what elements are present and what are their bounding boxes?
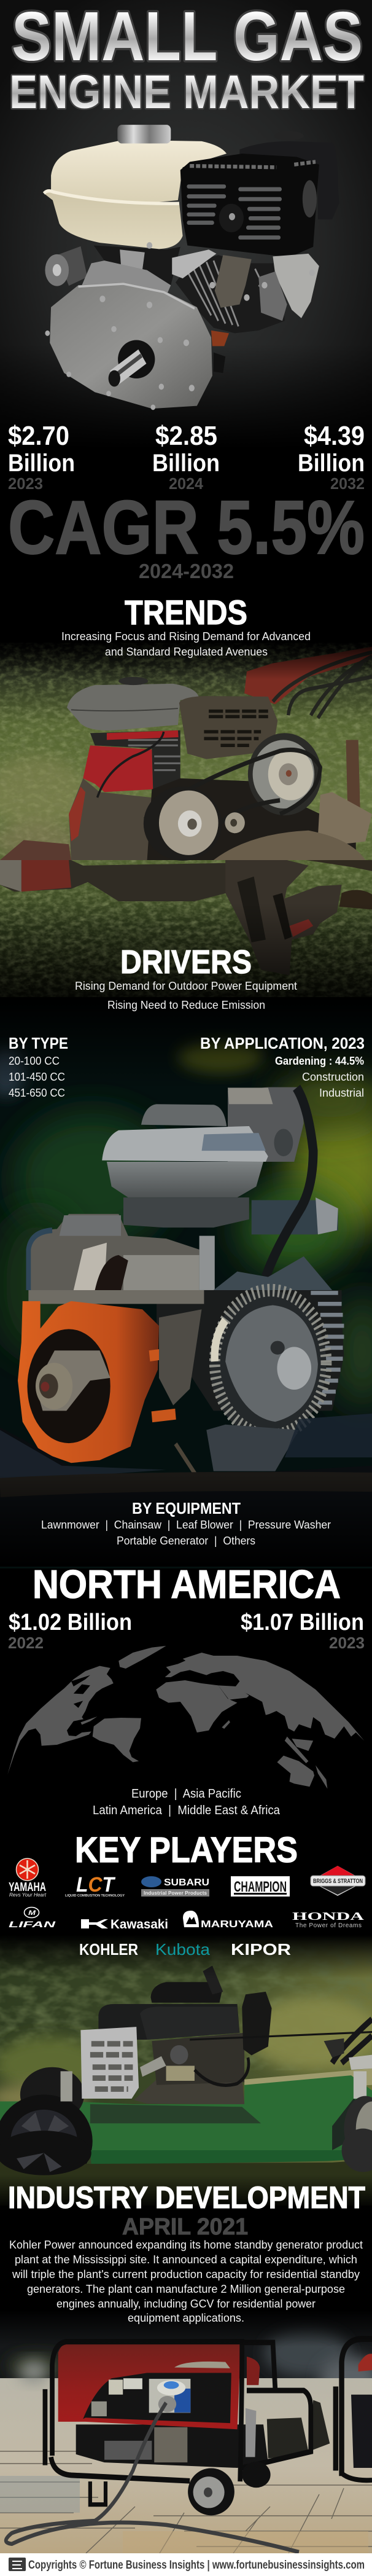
by type segment: 101-450 CC xyxy=(9,1071,65,1083)
logo: maruyama: MARUYAMA xyxy=(201,1919,274,1930)
engine lower case xyxy=(69,778,151,860)
engine shroud xyxy=(179,696,277,759)
shaft xyxy=(200,1236,215,1290)
logo: kohler: KOHLER xyxy=(79,1940,138,1959)
bottom shade xyxy=(0,1474,372,1567)
rear post xyxy=(346,740,360,808)
hub xyxy=(36,1350,110,1411)
stat: 2023 market size xyxy=(8,421,75,493)
central dark chassis xyxy=(147,778,356,860)
madagascar xyxy=(222,1720,230,1729)
logo: subaru xyxy=(141,1876,209,1897)
cooling fan xyxy=(210,1290,326,1438)
valve cover xyxy=(273,254,319,318)
logo: honda xyxy=(292,1910,364,1929)
drivers text xyxy=(75,980,297,1011)
by application segment: Industrial xyxy=(319,1087,364,1099)
exhaust pipe xyxy=(215,255,252,308)
fin block top xyxy=(157,1290,344,1411)
tank cap xyxy=(118,677,148,685)
bolts xyxy=(45,242,315,410)
stat: 2032 market size xyxy=(298,421,365,493)
by equipment segment: BY EQUIPMENT xyxy=(132,1499,241,1517)
drivers text: Rising Need to Reduce Emission xyxy=(107,999,265,1011)
orange shroud xyxy=(18,1301,159,1463)
carburetor xyxy=(140,2045,195,2081)
logo: champion: CHAMPION xyxy=(234,1879,287,1895)
shroud opening xyxy=(27,1329,110,1443)
industry development date: APRIL 2021 xyxy=(122,2214,248,2240)
by type segment: 451-650 CC xyxy=(9,1087,65,1099)
mower deck lower xyxy=(90,2150,372,2165)
fuel tank xyxy=(51,140,227,203)
metal grill xyxy=(80,2027,139,2099)
by equipment segment: Portable Generator | Others xyxy=(117,1535,255,1547)
cylinder fins xyxy=(176,255,285,333)
north america heading: NORTH AMERICA xyxy=(33,1562,341,1607)
drivers text: Rising Demand for Outdoor Power Equipment xyxy=(75,980,297,992)
paved ground xyxy=(0,2360,372,2553)
starter xyxy=(57,246,87,286)
logo: lct xyxy=(65,1873,125,1898)
orange bracket xyxy=(211,331,229,346)
logo: lifan: LIFAN xyxy=(9,1919,56,1929)
by equipment segment xyxy=(41,1499,331,1547)
spark plug cable xyxy=(266,1088,313,1277)
red rear body xyxy=(244,647,372,704)
foreground grass xyxy=(0,2159,372,2213)
power cable xyxy=(6,2403,299,2552)
right cylinder xyxy=(252,1200,338,1234)
stat: 2032 market size: Billion xyxy=(298,450,365,477)
stat: 2024 market size: 2024 xyxy=(169,474,204,493)
stat: 2024 market size xyxy=(152,421,220,493)
north america xyxy=(7,1666,114,1774)
fuel hose xyxy=(195,2057,249,2085)
stat: 2023 market size: Billion xyxy=(8,450,75,477)
north america 2023 value xyxy=(241,1610,365,1652)
title xyxy=(9,0,364,119)
bracket xyxy=(318,792,372,844)
red engine cap xyxy=(247,2357,260,2385)
mower deck xyxy=(0,2075,372,2150)
logo: maruyama xyxy=(183,1911,274,1930)
air filter dome xyxy=(141,1104,227,1126)
tiller top shade xyxy=(0,643,372,679)
trends text: Increasing Focus and Rising Demand for Advanced xyxy=(61,630,311,643)
tines xyxy=(225,860,342,975)
by application segment xyxy=(200,1034,365,1099)
north america 2022 value xyxy=(8,1610,132,1652)
mower bottom shade xyxy=(0,2175,372,2206)
panel: mower photo xyxy=(0,1935,372,2213)
logo: yamaha: Revs Your Heart xyxy=(9,1892,47,1898)
logo: lct: LCT xyxy=(76,1873,116,1897)
rear wheel xyxy=(242,2462,271,2488)
other regions: Europe | Asia Pacific xyxy=(131,1787,241,1801)
engine underside xyxy=(76,2424,268,2468)
rear fins xyxy=(311,1293,344,1403)
logo: kubota: Kubota xyxy=(155,1940,211,1959)
hero image: small gas engine xyxy=(44,125,339,410)
front pulley xyxy=(144,786,245,861)
front wheel xyxy=(188,2468,234,2515)
stat: 2023 market size: 2023 xyxy=(8,474,43,493)
north america 2022 value: 2022 xyxy=(8,1634,44,1652)
oil tank xyxy=(242,1992,272,2056)
crankcase top xyxy=(80,260,171,296)
lower block xyxy=(152,2033,244,2085)
arabia xyxy=(219,1685,249,1700)
bokeh background xyxy=(0,1041,372,1407)
recoil starter xyxy=(150,1982,222,2003)
scandinavia xyxy=(183,1653,214,1662)
by type segment: 20-100 CC xyxy=(9,1055,60,1067)
centre block xyxy=(159,1309,202,1405)
second generator xyxy=(336,2339,372,2480)
industry development text: generators. The plant can manufacture 2 Million general-purpose xyxy=(27,2283,345,2295)
orange tubes xyxy=(149,1352,179,1417)
by application segment: BY APPLICATION, 2023 xyxy=(200,1034,365,1052)
caribbean xyxy=(80,1717,97,1725)
air filter box xyxy=(102,1126,268,1162)
tiller beam xyxy=(0,860,238,901)
gear case xyxy=(50,283,212,409)
stat: 2023 market size: $2.70 xyxy=(8,421,69,451)
logo: honda: The Power of Dreams xyxy=(295,1922,362,1929)
rear pulley xyxy=(248,733,322,815)
industry development text: equipment applications. xyxy=(128,2312,244,2324)
fender xyxy=(214,831,365,860)
fuel tank xyxy=(67,684,199,730)
engine body xyxy=(98,2004,239,2040)
trends heading: TRENDS xyxy=(125,593,247,632)
industry development text: engines annually, including GCV for residential power xyxy=(56,2298,316,2310)
fan wires xyxy=(97,732,164,797)
dark ground xyxy=(0,1427,372,1564)
globe map xyxy=(7,1646,364,1789)
rear wheel xyxy=(20,2067,84,2122)
generator top shade xyxy=(0,2310,372,2347)
industry development text: plant at the Mississippi site. It announced a capital expenditure, which xyxy=(15,2253,357,2266)
stat: 2032 market size: 2032 xyxy=(330,474,365,493)
logo: subaru: Industrial Power Products xyxy=(144,1890,207,1896)
power socket xyxy=(157,2380,185,2395)
left attachment xyxy=(0,840,71,860)
south america xyxy=(93,1718,141,1762)
stat: 2032 market size: $4.39 xyxy=(304,421,365,451)
stat: 2024 market size: $2.85 xyxy=(155,421,217,451)
logo: honda: HONDA xyxy=(292,1910,364,1922)
engine base xyxy=(134,2077,244,2104)
eurasia xyxy=(165,1656,364,1740)
logo: lifan: M xyxy=(28,1909,36,1917)
australia xyxy=(277,1756,314,1787)
other regions xyxy=(93,1787,281,1817)
by application segment: Gardening : 44.5% xyxy=(275,1055,364,1067)
panel: engine photo xyxy=(0,997,372,1568)
filter neck xyxy=(123,1197,249,1227)
handlebars xyxy=(273,652,372,718)
logo: kawasaki xyxy=(81,1917,168,1932)
mower top shade xyxy=(0,1935,372,1978)
logo: yamaha xyxy=(9,1858,47,1898)
top shade xyxy=(0,997,372,1089)
drivers heading: DRIVERS xyxy=(120,944,252,981)
logo: lifan xyxy=(9,1907,56,1929)
key players heading: KEY PLAYERS xyxy=(75,1830,298,1870)
red housing xyxy=(58,2343,241,2429)
panel: tiller photo xyxy=(0,643,372,997)
front wheel xyxy=(0,2094,93,2188)
logo: yamaha: YAMAHA xyxy=(9,1881,46,1894)
fan shroud xyxy=(214,1256,332,1290)
control cable xyxy=(190,2032,372,2040)
logo: kipor: KIPOR xyxy=(231,1940,291,1959)
logo: subaru: SUBARU xyxy=(164,1877,209,1888)
north america 2023 value: 2023 xyxy=(329,1634,365,1652)
logo: kawasaki: Kawasaki xyxy=(110,1917,168,1932)
lower engine block xyxy=(28,1214,200,1290)
trends text xyxy=(61,630,311,658)
rear housing xyxy=(228,1087,304,1162)
by type segment: BY TYPE xyxy=(9,1034,68,1052)
drive belts xyxy=(145,750,320,825)
other regions: Latin America | Middle East & Africa xyxy=(93,1804,281,1817)
lawn strip xyxy=(244,2069,372,2091)
trends text: and Standard Regulated Avenues xyxy=(105,646,268,658)
battery guard xyxy=(267,2400,330,2459)
control panel xyxy=(83,2373,231,2423)
under-tank mechanism xyxy=(94,246,180,285)
footer xyxy=(0,2553,372,2576)
fuel cap xyxy=(117,125,171,143)
handles right xyxy=(332,2019,372,2063)
panel: generator photo xyxy=(0,2310,372,2553)
industry development text xyxy=(9,2239,363,2324)
africa xyxy=(156,1680,238,1732)
black engine shroud xyxy=(180,154,319,257)
logo: lct: LIQUID COMBUSTION TECHNOLOGY xyxy=(65,1894,125,1898)
north america 2022 value: $1.02 Billion xyxy=(9,1610,132,1635)
lower bracket xyxy=(206,1425,299,1471)
by application segment: Construction xyxy=(302,1071,364,1083)
industry development text: Kohler Power announced expanding its home standby generator product xyxy=(9,2239,363,2251)
logo: champion xyxy=(231,1876,290,1897)
indonesia xyxy=(285,1737,327,1789)
cylinder block xyxy=(90,730,180,789)
tiller bottom shade xyxy=(0,903,372,997)
aluminium bracket xyxy=(172,249,216,278)
generator frame xyxy=(45,2342,311,2481)
stat: 2024 market size: Billion xyxy=(152,450,220,477)
output shaft xyxy=(109,340,155,386)
greenland xyxy=(118,1646,166,1669)
panel: hero background xyxy=(0,0,372,448)
cagr period: 2024-2032 xyxy=(139,560,234,582)
fuel tank lower xyxy=(44,191,183,249)
red engine cover xyxy=(83,745,153,792)
legs xyxy=(90,2481,106,2505)
footer logo xyxy=(9,2558,26,2571)
logo: briggs and stratton xyxy=(310,1866,365,1896)
by equipment segment: Lawnmower | Chainsaw | Leaf Blower | Pressure Washer xyxy=(41,1519,331,1531)
industry development text: will triple the plant's current production capacity for residential standby xyxy=(12,2268,360,2280)
rear black air cleaner xyxy=(239,141,339,219)
by type segment xyxy=(9,1034,68,1099)
air filter lower xyxy=(107,1162,263,1197)
